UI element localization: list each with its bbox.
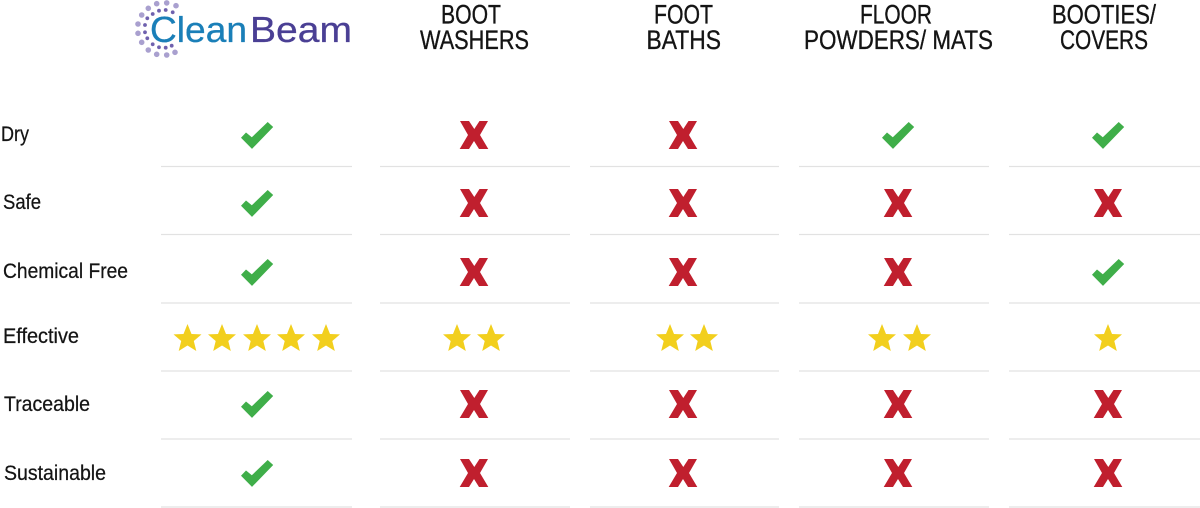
icon: logo dot ring bbox=[135, 0, 179, 58]
icons: Safe ratings bbox=[241, 189, 1122, 217]
heading: Foot Baths: BATHS bbox=[646, 25, 721, 55]
heading: Floor Powders / Mats: POWDERS/ MATS bbox=[804, 25, 993, 55]
icons: Effective star ratings bbox=[174, 324, 1122, 351]
heading: Booties / Covers: BOOTIES/ bbox=[1052, 0, 1157, 30]
row label: Chemical Free: Chemical Free bbox=[3, 260, 128, 283]
icons: Sustainable ratings bbox=[241, 459, 1122, 487]
heading: Booties / Covers bbox=[1052, 0, 1157, 55]
row: Effective bbox=[3, 324, 1122, 351]
icons: Dry ratings bbox=[241, 121, 1124, 149]
row label: Sustainable: Sustainable bbox=[4, 462, 106, 485]
row label: Safe: Safe bbox=[3, 191, 41, 214]
logo: CleanBeam bbox=[135, 0, 352, 58]
row label: Dry: Dry bbox=[1, 123, 29, 146]
heading: Boot Washers: WASHERS bbox=[420, 25, 529, 55]
logo wordmark second part: Beam bbox=[250, 9, 352, 50]
heading: Foot Baths: FOOT bbox=[654, 0, 713, 30]
heading: Floor Powders / Mats: FLOOR bbox=[860, 0, 932, 30]
heading: Boot Washers bbox=[420, 0, 529, 55]
heading: Floor Powders / Mats bbox=[804, 0, 993, 55]
heading: Foot Baths bbox=[646, 0, 721, 55]
heading: Booties / Covers: COVERS bbox=[1060, 25, 1148, 55]
row label: Effective: Effective bbox=[3, 325, 79, 348]
logo wordmark: Clean bbox=[150, 9, 247, 50]
row: Chemical Free bbox=[3, 258, 1124, 286]
icons: Chemical Free ratings bbox=[241, 258, 1124, 286]
icons: Traceable ratings bbox=[241, 390, 1122, 418]
row: Safe bbox=[3, 189, 1122, 217]
heading: Boot Washers: BOOT bbox=[441, 0, 501, 30]
row: Traceable bbox=[4, 390, 1122, 418]
row label: Traceable: Traceable bbox=[4, 393, 90, 416]
row: Sustainable bbox=[4, 459, 1122, 487]
row: Dry bbox=[1, 121, 1124, 149]
